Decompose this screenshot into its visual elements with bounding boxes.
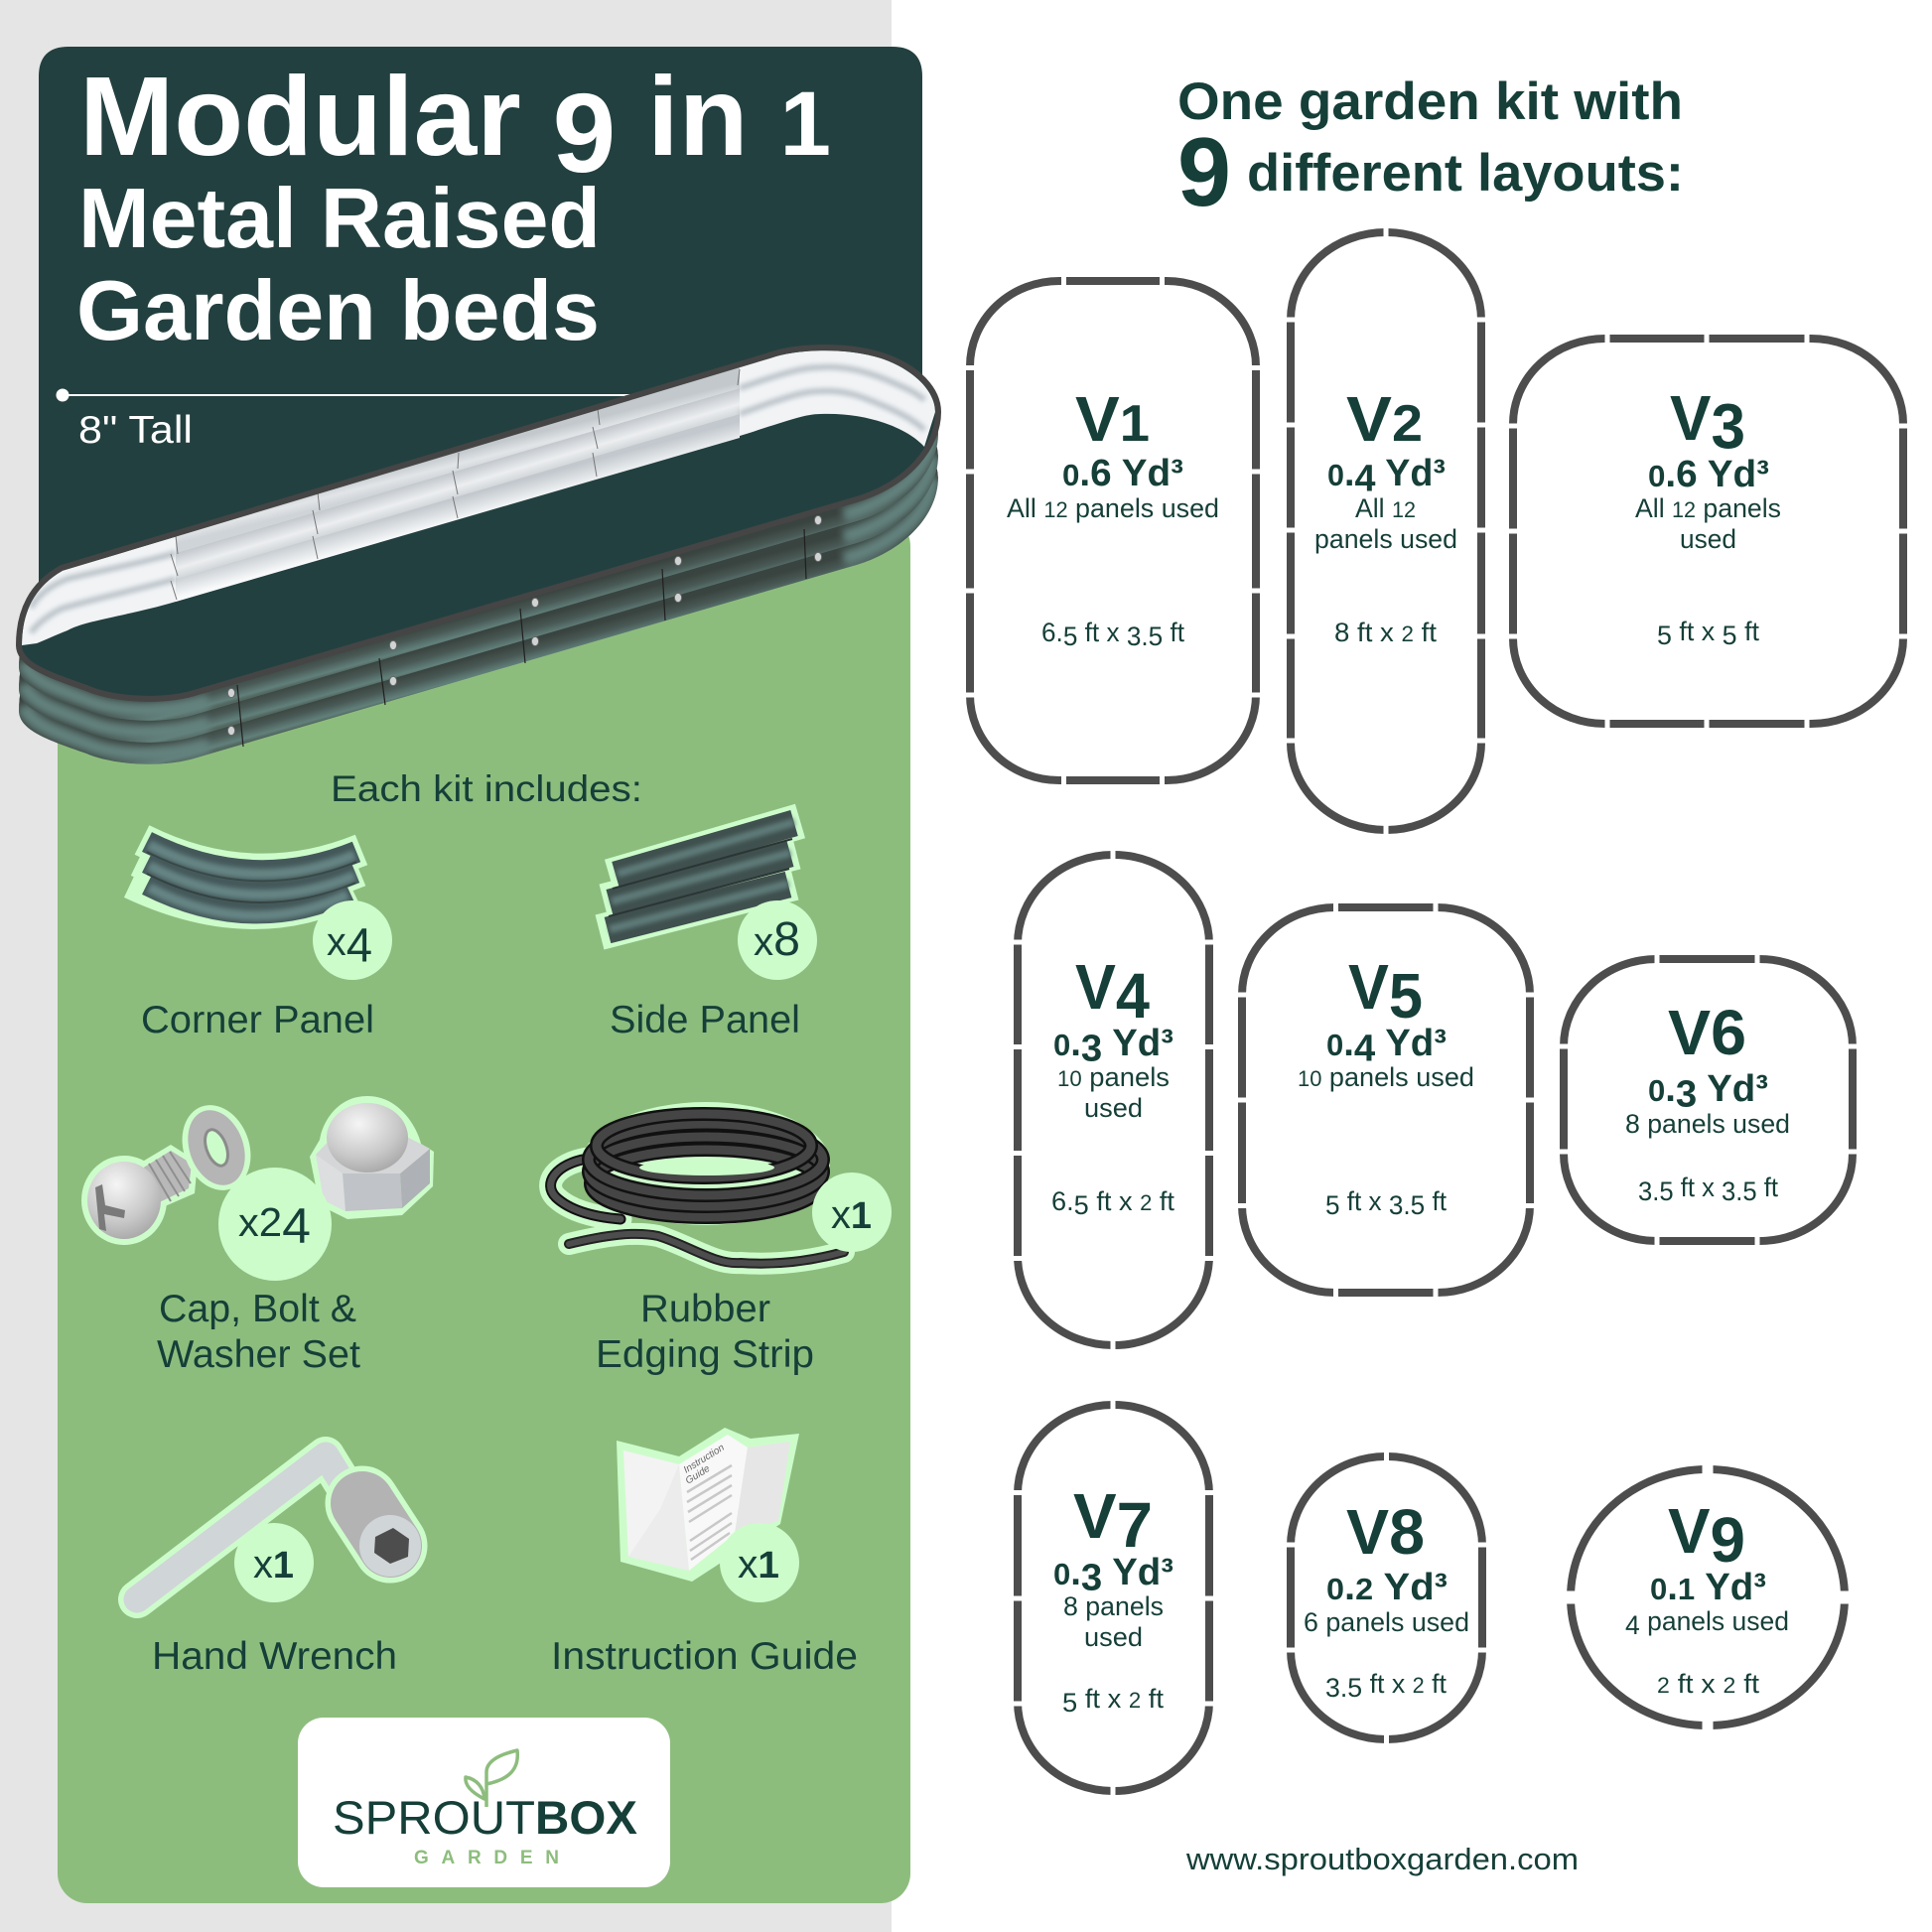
- text: V7 specs: ft x: [1077, 1684, 1129, 1714]
- badge: x24: x2: [238, 1199, 281, 1245]
- icon: instruction guide: Guide: [684, 1463, 713, 1487]
- text: V2 specs: Yd³: [1375, 453, 1446, 494]
- text: V1 specs: ft: [1163, 618, 1184, 647]
- text: V4 specs: [1051, 951, 1174, 1220]
- text: V5 specs: 10 panels used: [1298, 1062, 1474, 1092]
- text: V7 specs: 5: [1062, 1688, 1077, 1718]
- icon: hand wrench: [137, 1455, 421, 1599]
- label: rubber edging strip: Rubber: [640, 1288, 770, 1330]
- text: V5 specs: 5: [1389, 960, 1423, 1032]
- text: V2 specs: All 12: [1355, 493, 1416, 523]
- text: V8 specs: [1304, 1496, 1469, 1703]
- badge: x1: [234, 1523, 314, 1602]
- text: V7 specs: V: [1073, 1480, 1116, 1552]
- height callout: [56, 389, 645, 452]
- text: V4 specs: 3: [1081, 1028, 1102, 1069]
- panel: dark title background: [39, 47, 922, 695]
- outline: V6 panels: [1556, 951, 1861, 1249]
- text: V9 specs: 2 ft x 2 ft: [1657, 1669, 1760, 1699]
- text: V5 specs: 0.: [1326, 1023, 1354, 1064]
- text: V7 specs: 7: [1117, 1489, 1153, 1561]
- text: V3 specs: ft x: [1672, 617, 1723, 646]
- text: V9 specs: 9: [1711, 1504, 1745, 1576]
- text: V4 specs: 2 ft: [1140, 1186, 1174, 1216]
- outline: V3 panels: [1505, 331, 1911, 732]
- label: corner panel: Corner Panel: [141, 999, 374, 1041]
- badge: x4: x: [327, 920, 346, 964]
- text: V5 specs: 5: [1325, 1190, 1340, 1220]
- layout: V6: [1556, 951, 1861, 1249]
- text: V1 specs: ft x: [1077, 618, 1127, 647]
- badge: x24: 4: [282, 1198, 311, 1254]
- item: rubber edging strip: [551, 1102, 892, 1376]
- item: hand wrench: [137, 1455, 421, 1678]
- icon: instruction guide: Instruction: [682, 1443, 727, 1476]
- text: V3 specs: 3: [1711, 390, 1745, 462]
- text: V6 specs: V6: [1668, 997, 1746, 1068]
- text: V2 specs: V2: [1346, 383, 1423, 455]
- website url: www.sproutboxgarden.com: [1185, 1842, 1579, 1876]
- title: in: [616, 54, 779, 179]
- text: V1 specs: 6.: [1041, 618, 1064, 647]
- text: V8 specs: 2 ft: [1413, 1669, 1447, 1699]
- item: instruction guide: [551, 1428, 858, 1678]
- text: V6 specs: ft: [1757, 1173, 1778, 1202]
- text: V3 specs: 5: [1723, 621, 1737, 650]
- text: V4 specs: 5: [1074, 1190, 1089, 1220]
- text: V3 specs: V: [1670, 382, 1713, 454]
- item: cap, bolt and washer set: [81, 1095, 434, 1376]
- text: V2 specs: 0.: [1327, 453, 1355, 494]
- text: V6 specs: 3.5: [1722, 1176, 1757, 1206]
- item: side panel: [600, 821, 817, 1041]
- badge: x8: x8: [754, 913, 800, 966]
- text: V4 specs: V: [1075, 951, 1118, 1023]
- label: hand wrench: Hand Wrench: [152, 1635, 397, 1678]
- icon: side panel: [600, 821, 800, 932]
- heading: one garden kit with 9 different layouts: One garden kit with: [1177, 72, 1683, 131]
- text: V8 specs: V8: [1346, 1496, 1425, 1568]
- text: V6 specs: ft x: [1674, 1173, 1722, 1202]
- text: V4 specs: 10 panels: [1057, 1062, 1170, 1092]
- icon: washer: [171, 1095, 262, 1200]
- title: 9: [553, 70, 616, 196]
- text: V8 specs: 3.5: [1325, 1673, 1362, 1703]
- text: V3 specs: ft: [1737, 617, 1759, 646]
- badge: x8: [738, 900, 817, 980]
- heading: one garden kit with 9 different layouts: [1177, 72, 1684, 226]
- badge: x24: [218, 1168, 332, 1281]
- text: V6 specs: 8 panels used: [1625, 1109, 1790, 1139]
- heading: one garden kit with 9 different layouts: different layouts:: [1247, 144, 1684, 203]
- text: V6 specs: 0.: [1648, 1068, 1676, 1110]
- text: V9 specs: panels used: [1640, 1606, 1789, 1636]
- text: V1 specs: [1007, 383, 1219, 651]
- text: V7 specs: 3: [1081, 1557, 1102, 1598]
- badge: x1: [812, 1173, 892, 1252]
- text: V1 specs: 5: [1063, 621, 1077, 651]
- text: V9 specs: 4: [1625, 1610, 1640, 1640]
- icon: cap nut: [310, 1096, 434, 1219]
- text: V8 specs: ft x: [1362, 1669, 1413, 1699]
- text: V2 specs: panels used: [1314, 524, 1457, 554]
- text: V2 specs: 4: [1354, 458, 1375, 499]
- text: V5 specs: ft: [1425, 1186, 1447, 1216]
- text: V7 specs: 2 ft: [1129, 1684, 1164, 1714]
- text: V9 specs: 0.1 Yd³: [1650, 1567, 1766, 1608]
- badge: x1: x1: [253, 1543, 294, 1587]
- text: V9 specs: [1625, 1495, 1789, 1699]
- text: V4 specs: Yd³: [1102, 1023, 1173, 1064]
- logo: Sproutbox Garden: GARDEN: [414, 1848, 559, 1868]
- heading: one garden kit with 9 different layouts: 9: [1177, 117, 1231, 226]
- outline: V1 panels: [962, 273, 1264, 788]
- label: side panel: Side Panel: [610, 999, 800, 1041]
- logo: Sproutbox Garden: BOX: [535, 1791, 637, 1844]
- badge: x1: [720, 1523, 799, 1602]
- title: [76, 54, 831, 358]
- badge: x4: [313, 900, 392, 980]
- illustration: raised garden bed: [19, 347, 938, 764]
- text: V6 specs: 3: [1676, 1073, 1697, 1115]
- panel: green kit contents background: [58, 516, 910, 1903]
- text: V3 specs: All 12 panels: [1635, 493, 1781, 523]
- layout: V7: [1010, 1397, 1217, 1799]
- text: V5 specs: Yd³: [1375, 1023, 1447, 1064]
- text: V5 specs: V: [1348, 951, 1391, 1023]
- text: V1 specs: All 12 panels used: [1007, 493, 1219, 523]
- text: V4 specs: 0.: [1053, 1023, 1081, 1064]
- label: cap, bolt and washer set: Washer Set: [157, 1333, 360, 1376]
- text: V6 specs: [1625, 997, 1790, 1206]
- icon: corner panel: [131, 840, 361, 915]
- text: V9 specs: V: [1668, 1495, 1711, 1567]
- outline: V2 panels: [1283, 224, 1489, 838]
- outline: V4 panels: [1010, 847, 1217, 1353]
- text: V4 specs: 6.: [1051, 1186, 1074, 1216]
- text: V7 specs: Yd³: [1102, 1552, 1173, 1593]
- label: cap, bolt and washer set: [157, 1288, 360, 1376]
- text: V3 specs: used: [1680, 524, 1736, 554]
- text: V4 specs: 4: [1116, 960, 1150, 1032]
- text: V6 specs: 3.5: [1638, 1176, 1674, 1206]
- text: V8 specs: 6 panels used: [1304, 1607, 1469, 1637]
- outline: V9 panels: [1561, 1459, 1855, 1735]
- title: Metal Raised: [78, 172, 601, 266]
- text: V4 specs: used: [1084, 1093, 1143, 1123]
- icon: bolt: [81, 1145, 198, 1245]
- outline: V8 panels: [1283, 1449, 1490, 1747]
- icon: rubber strip coil: [551, 1102, 844, 1264]
- logo: Sproutbox Garden: [298, 1718, 670, 1887]
- label: rubber edging strip: Edging Strip: [596, 1333, 814, 1376]
- icon: sprout: [466, 1750, 517, 1807]
- text: V1 specs: V1: [1075, 383, 1150, 455]
- layout: V4: [1010, 847, 1217, 1353]
- text: V3 specs: 0.6 Yd³: [1648, 454, 1769, 495]
- text: V3 specs: 5: [1657, 621, 1672, 650]
- text: V7 specs: [1053, 1480, 1173, 1718]
- heading: each kit includes: Each kit includes:: [331, 768, 642, 809]
- text: V6 specs: Yd³: [1697, 1068, 1768, 1110]
- text: V5 specs: ft x: [1340, 1186, 1389, 1216]
- label: cap, bolt and washer set: Cap, Bolt &: [159, 1288, 356, 1330]
- layout: V8: [1283, 1449, 1490, 1747]
- text: V5 specs: 3.5: [1389, 1190, 1425, 1220]
- icon: instruction guide: [617, 1428, 799, 1582]
- text: V8 specs: 0.2 Yd³: [1326, 1567, 1448, 1608]
- height callout: 8" Tall: [78, 409, 193, 452]
- layout: V3: [1505, 331, 1911, 732]
- layout: V9: [1561, 1459, 1855, 1735]
- title: Modular: [79, 54, 515, 179]
- badge: x4: 4: [346, 920, 372, 973]
- logo: Sproutbox Garden: SPROUT: [333, 1791, 535, 1844]
- layout: V1: [962, 273, 1264, 788]
- text: V5 specs: [1298, 951, 1474, 1220]
- text: V7 specs: 8 panels: [1063, 1591, 1164, 1621]
- text: V2 specs: [1314, 383, 1457, 647]
- title: 1: [779, 73, 831, 175]
- text: V3 specs: [1635, 382, 1781, 650]
- label: instruction guide: Instruction Guide: [551, 1635, 858, 1678]
- label: rubber edging strip: [596, 1288, 814, 1376]
- badge: x1: x1: [738, 1543, 779, 1587]
- layout: V5: [1234, 899, 1538, 1301]
- text: V2 specs: 8 ft x 2 ft: [1334, 618, 1437, 647]
- text: V1 specs: 0.6 Yd³: [1062, 453, 1183, 494]
- text: V4 specs: ft x: [1089, 1186, 1140, 1216]
- layout: V2: [1283, 224, 1489, 838]
- text: V5 specs: 4: [1354, 1028, 1375, 1069]
- text: V7 specs: 0.: [1053, 1552, 1081, 1593]
- item: corner panel: [131, 840, 392, 1041]
- badge: x1: x1: [831, 1193, 872, 1237]
- title: Garden beds: [76, 264, 600, 358]
- text: V7 specs: used: [1084, 1622, 1143, 1652]
- outline: V5 panels: [1234, 899, 1538, 1301]
- outline: V7 panels: [1010, 1397, 1217, 1799]
- text: V1 specs: 3.5: [1127, 621, 1163, 651]
